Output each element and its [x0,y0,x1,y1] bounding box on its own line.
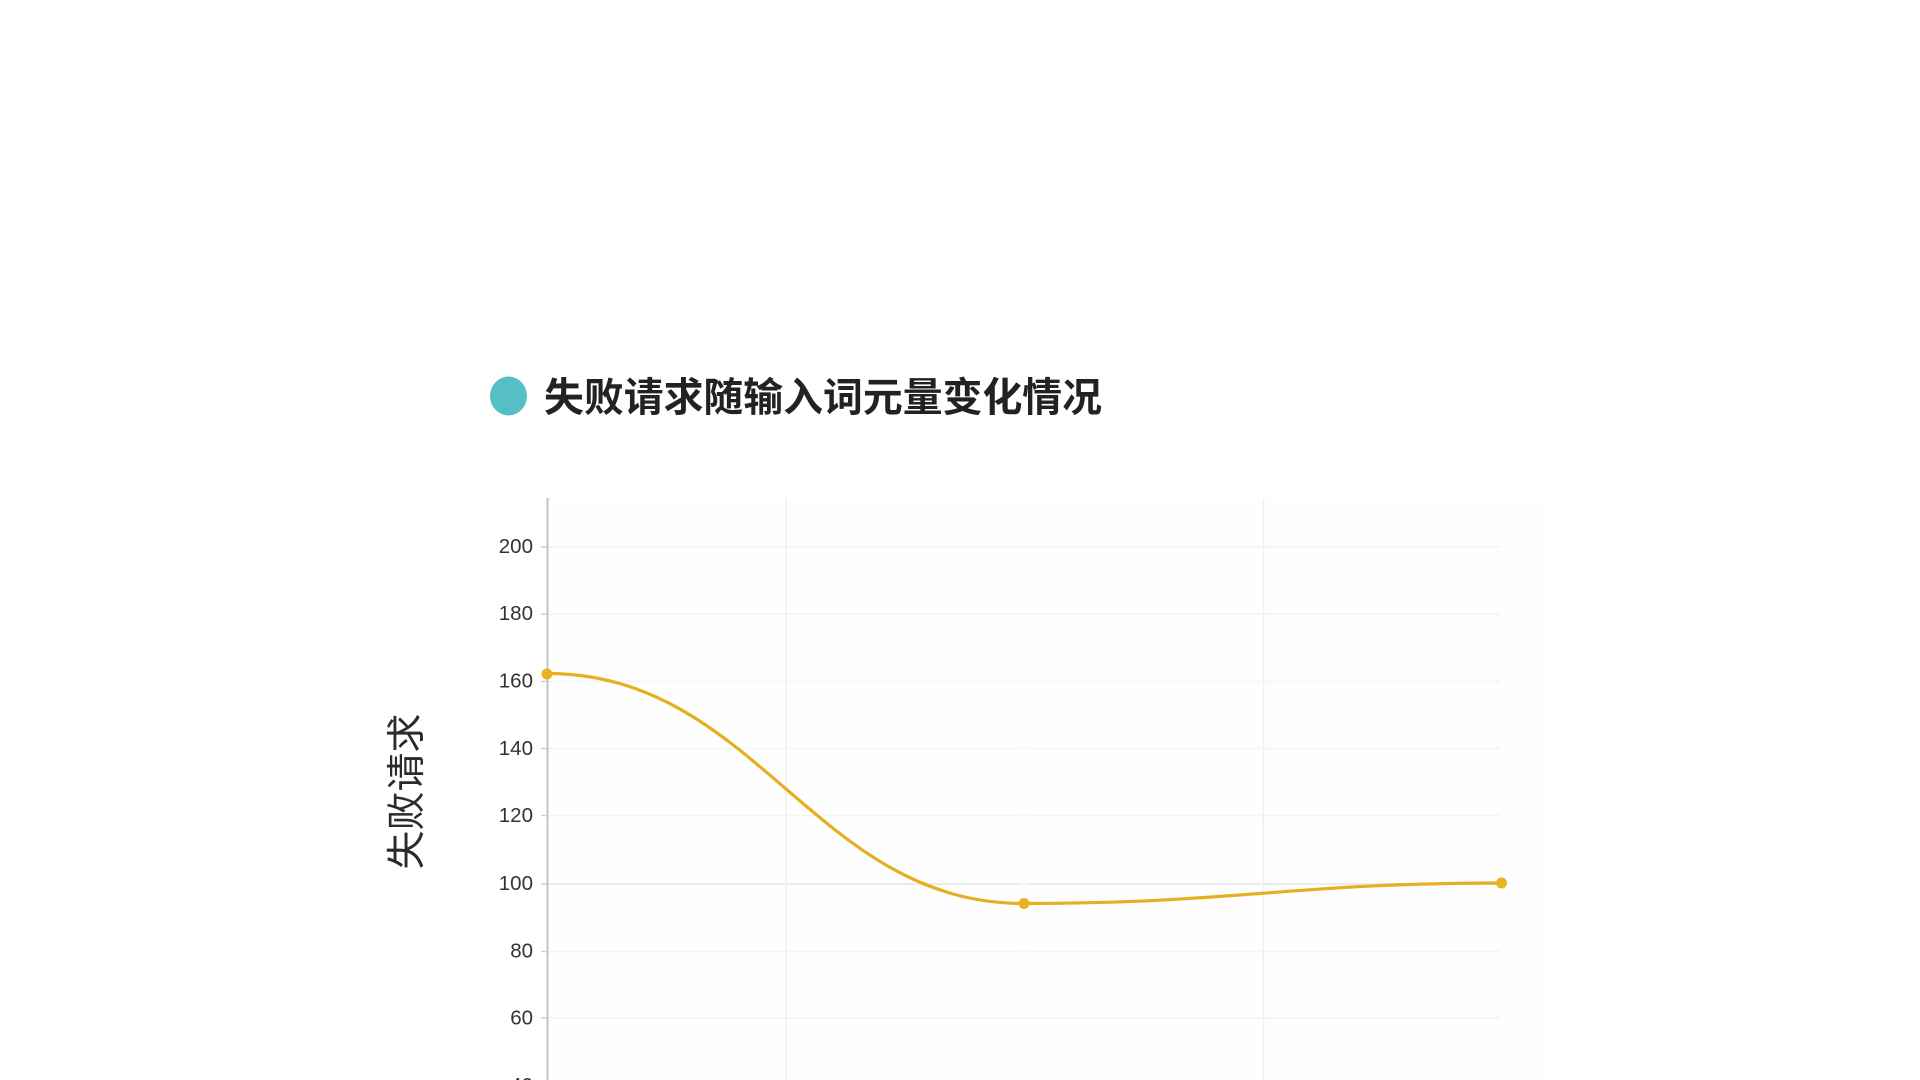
title with teal bullet [490,376,1102,420]
y axis tick labels: 80 [510,940,533,962]
y axis tick labels: 60 [510,1006,533,1030]
line chart: failed requests by input tokens [386,498,1507,1080]
y axis title: 失败请求 [386,713,429,870]
y axis tick labels: 100 [499,872,533,895]
y axis tick labels: 120 [499,804,533,827]
heading: chart title: 失败请求随输入词元量变化情况 [544,376,1102,420]
icon: teal bullet [490,376,527,416]
y axis tick labels: 140 [499,737,533,760]
y axis tick labels: 200 [499,535,533,558]
horizontal and vertical grid lines [547,498,1500,1080]
y axis line and ticks [541,498,548,1080]
data line [547,674,1502,904]
data points [542,668,1507,909]
y axis tick labels: 160 [499,670,533,692]
y axis tick labels [499,535,533,1080]
y axis tick labels: 180 [499,602,533,625]
